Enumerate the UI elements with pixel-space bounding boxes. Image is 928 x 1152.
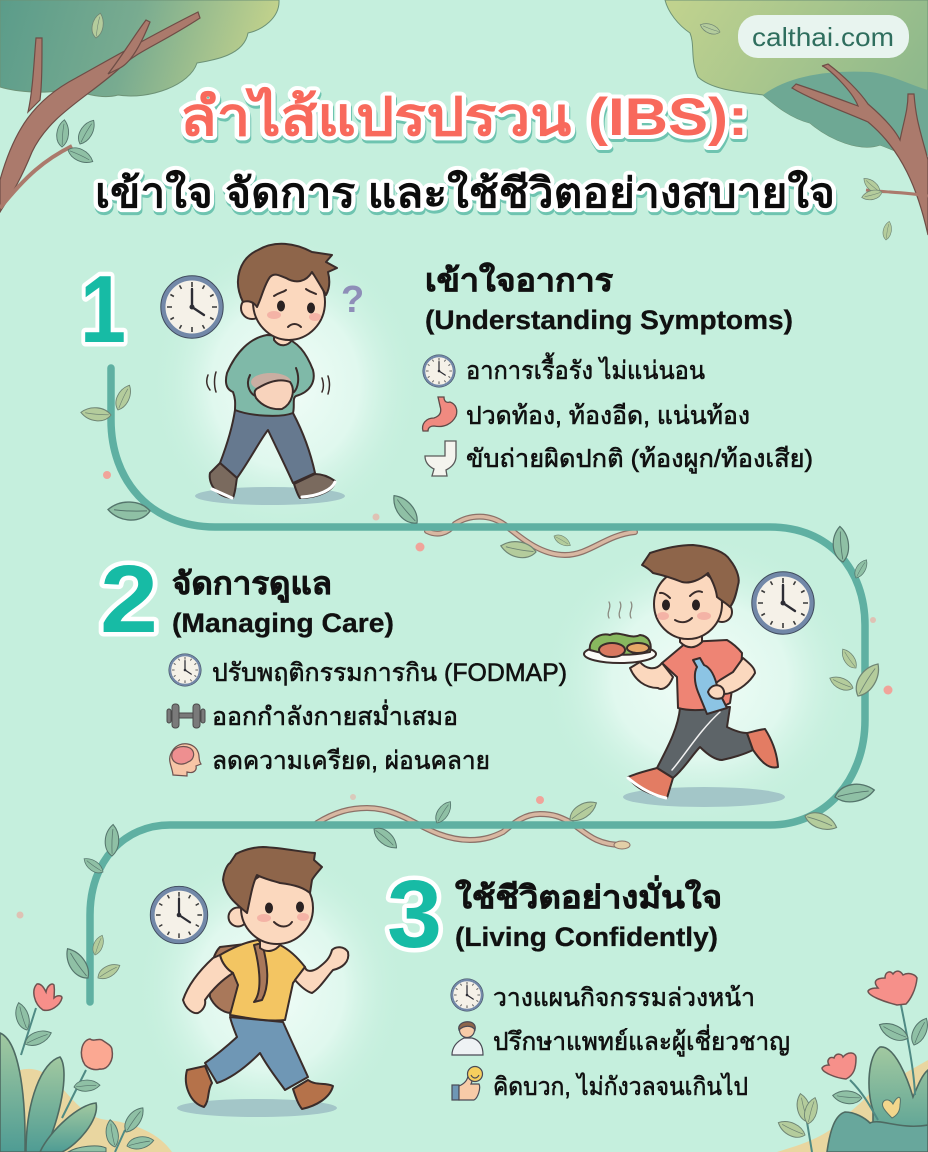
glow behind character 2 — [540, 535, 860, 825]
number 2: 2 — [100, 546, 158, 653]
winding path — [90, 368, 865, 1002]
icon: clock — [423, 355, 455, 387]
icon: doctor — [452, 1022, 483, 1055]
flower: left peach — [81, 1039, 112, 1070]
website badge — [738, 15, 909, 58]
title: ลำไส้แปรปรวน (IBS): — [180, 86, 748, 147]
website badge: calthai.com — [752, 22, 894, 52]
icon: thumbs up with smile — [452, 1066, 482, 1100]
character 3: boy walking with backpack — [177, 847, 348, 1117]
plants: bottom right — [775, 971, 928, 1152]
character 2 text block: ปรับพฤติกรรมการกิน (FODMAP) — [212, 659, 567, 687]
decorative dots — [16, 471, 892, 918]
plants: bottom left — [0, 984, 172, 1152]
leaves on the path — [61, 383, 884, 983]
path leaves and vines behind path — [317, 517, 635, 849]
icon: clock — [451, 979, 483, 1011]
title: เข้าใจ จัดการ และใช้ชีวิตอย่างสบายใจ — [95, 169, 835, 216]
clock beside character 1 — [161, 276, 223, 338]
character 1 text block: (Understanding Symptoms) — [425, 305, 793, 335]
character 3 text block: วางแผนกิจกรรมล่วงหน้า — [493, 984, 755, 1012]
character 2 text block: (Managing Care) — [172, 608, 394, 638]
title — [95, 86, 835, 216]
tree: top left — [0, 0, 279, 212]
character 3 text block — [451, 875, 790, 1101]
character 3 text block: คิดบวก, ไม่กังวลจนเกินไป — [493, 1072, 748, 1101]
character 2: boy with salad and water — [584, 545, 785, 807]
icon: brain head — [170, 744, 201, 776]
clock beside character 2 — [752, 572, 814, 634]
flower: right small — [822, 1053, 856, 1079]
character 1 text block — [423, 262, 813, 476]
character 1 text block: เข้าใจอาการ — [425, 262, 613, 298]
character 2 text block: ออกกำลังกายสม่ำเสมอ — [212, 699, 458, 731]
icon: clock — [169, 654, 201, 686]
icon: toilet — [425, 441, 456, 476]
character 2 text block — [167, 566, 567, 776]
character 2 text block: จัดการดูแล — [172, 566, 332, 603]
glow behind character 3 — [135, 845, 405, 1135]
number 3: 3 — [387, 861, 442, 968]
character 3 text block: ใช้ชีวิตอย่างมั่นใจ — [455, 875, 722, 915]
icon: stomach — [423, 397, 457, 431]
flower: yellow bud — [882, 1097, 900, 1118]
question mark: ? — [341, 279, 364, 321]
character 1: boy with stomach ache — [195, 244, 345, 505]
glow behind character 1 — [150, 235, 420, 535]
clock beside character 3 — [150, 886, 208, 944]
icon: dumbbell — [167, 704, 205, 728]
flower: left tulip — [34, 984, 62, 1010]
character 2 text block: ลดความเครียด, ผ่อนคลาย — [212, 747, 490, 775]
character 1 text block: ปวดท้อง, ท้องอีด, แน่นท้อง — [466, 402, 750, 430]
tree: top right — [665, 0, 928, 241]
character 1 text block: อาการเรื้อรัง ไม่แน่นอน — [466, 352, 705, 385]
character 3 text block: (Living Confidently) — [455, 922, 718, 952]
character 1 text block: ขับถ่ายผิดปกติ (ท้องผูก/ท้องเสีย) — [466, 445, 813, 474]
character 3 text block: ปรึกษาแพทย์และผู้เชี่ยวชาญ — [493, 1024, 790, 1057]
number 1: 1 — [80, 256, 126, 363]
flower: right large — [868, 971, 917, 1005]
